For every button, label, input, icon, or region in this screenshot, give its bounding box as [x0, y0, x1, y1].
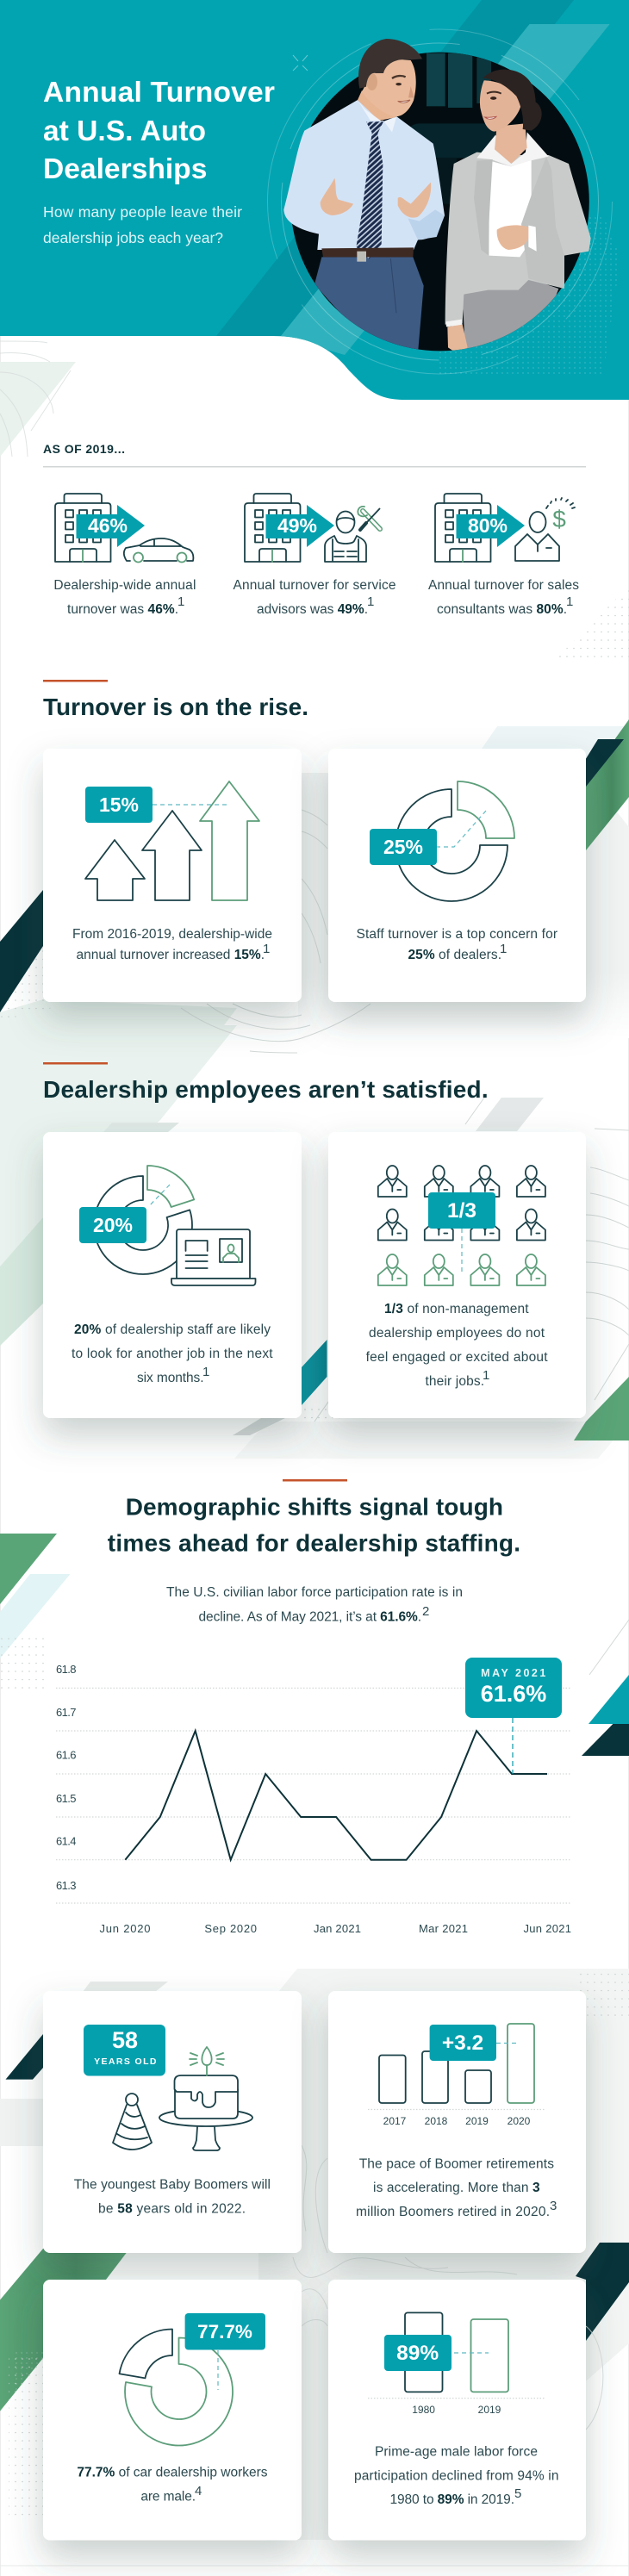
- y axis labels: 61.5: [56, 1792, 76, 1805]
- illustration: party hat and cake: YEARS OLD: [94, 2056, 158, 2067]
- panel: 20% likely to look for another job: six months.: [137, 1371, 203, 1385]
- bar chart: retirements by year: 2020: [508, 2115, 531, 2127]
- stat: dealership-wide turnover: 1: [177, 594, 184, 609]
- panel: prime-age male participation: participation declined from 94% in: [354, 2469, 558, 2484]
- icon: sales consultant: [515, 498, 575, 561]
- title: Dealerships: [43, 153, 207, 185]
- intro text: decline. As of May 2021, it’s at 61.6%.: [198, 1610, 421, 1625]
- bar chart: 1980 vs 2019: 1980: [412, 2404, 435, 2416]
- woman: [445, 152, 591, 325]
- y axis labels: 61.8: [56, 1663, 76, 1676]
- hero photo: two colleagues in circle: [283, 39, 591, 353]
- people grid: [378, 1166, 545, 1285]
- stat: dealership-wide turnover: [53, 494, 196, 617]
- stat: service advisors turnover: 49%: [277, 514, 317, 537]
- x axis labels: Jun 2020: [100, 1922, 150, 1935]
- title: [43, 77, 275, 185]
- donut chart: 25%: [383, 836, 423, 858]
- panel: 77.7% male workers: [43, 2280, 302, 2540]
- panel: 20% likely to look for another job: 1: [202, 1365, 209, 1379]
- y axis labels: [56, 1663, 76, 1892]
- y axis labels: 61.6: [56, 1749, 76, 1762]
- panel: boomer retirements bar chart: 3: [550, 2199, 557, 2213]
- panel: 15% turnover increase: annual turnover increased 15%.: [76, 948, 265, 962]
- panel: 1/3 not engaged: feel engaged or excited about: [366, 1350, 548, 1365]
- title: at U.S. Auto: [43, 115, 206, 147]
- panel: 77.7% male workers: 4: [195, 2484, 202, 2498]
- stat: sales consultants turnover: Annual turnover for sales: [428, 578, 579, 593]
- panel: prime-age male participation: Prime-age male labor force: [375, 2445, 538, 2460]
- callout: May 2021 61.6%: MAY 2021: [481, 1667, 548, 1679]
- bar chart: 1980 vs 2019: 89%: [396, 2342, 439, 2365]
- icon: mechanic: [325, 507, 380, 562]
- stat: sales consultants turnover: 1: [566, 594, 573, 609]
- panel: boomer retirements bar chart: The pace of Boomer retirements: [359, 2156, 554, 2171]
- panel: boomer retirements bar chart: million Boomers retired in 2020.: [356, 2205, 550, 2219]
- subtitle: How many people leave their: [43, 203, 242, 221]
- stat: service advisors turnover: [233, 494, 396, 617]
- donut chart: male share: 77.7%: [197, 2321, 252, 2343]
- bar chart: retirements by year: +3.2: [442, 2032, 483, 2055]
- panel: 15% turnover increase: 1: [263, 942, 270, 956]
- stat: dealership-wide turnover: 46%: [88, 514, 128, 537]
- x axis labels: Jan 2021: [314, 1922, 361, 1935]
- panel: boomer retirements bar chart: is accelerating. More than 3: [373, 2181, 540, 2195]
- intro text: [166, 1585, 463, 1625]
- intro text: The U.S. civilian labor force participation rate is in: [166, 1585, 463, 1600]
- panel: 15% turnover increase: [43, 749, 302, 1002]
- panel: 1/3 not engaged: [328, 1132, 586, 1418]
- stat: service advisors turnover: 1: [367, 594, 374, 609]
- stat: sales consultants turnover: 80%: [468, 514, 508, 537]
- panel: prime-age male participation: 1980 to 89% in 2019.: [389, 2492, 514, 2507]
- bar chart: 1980 vs 2019: 2019: [478, 2404, 501, 2416]
- panel: 1/3 not engaged: dealership employees do not: [369, 1326, 545, 1341]
- man: [283, 100, 445, 250]
- panel: 77.7% male workers: are male.: [140, 2490, 196, 2504]
- stat: service advisors turnover: Annual turnover for service: [233, 578, 396, 593]
- panel: boomer retirements bar chart: [328, 1991, 586, 2253]
- x axis labels: Sep 2020: [204, 1922, 257, 1935]
- illustration: party hat and cake: 58: [112, 2027, 138, 2053]
- bar chart: 1980 vs 2019: [368, 2312, 545, 2416]
- section heading: demographic shifts: Demographic shifts signal tough: [126, 1494, 503, 1520]
- section heading: demographic shifts: times ahead for dealership staffing.: [108, 1530, 520, 1556]
- stat: sales consultants turnover: [428, 494, 579, 617]
- y axis labels: 61.7: [56, 1706, 76, 1719]
- stat: dealership-wide turnover: Dealership-wide annual: [53, 578, 196, 593]
- x axis labels: Mar 2021: [419, 1922, 468, 1935]
- callout: May 2021 61.6%: 61.6%: [481, 1681, 546, 1707]
- section heading: turnover is on the rise: Turnover is on the rise.: [43, 694, 308, 720]
- panel: 1/3 not engaged: their jobs.: [426, 1374, 484, 1389]
- arrows chart: 15%: [99, 793, 139, 816]
- x axis labels: [100, 1922, 571, 1935]
- stat: service advisors turnover: advisors was 49%.: [257, 602, 368, 617]
- donut with laptop illustration: 20%: [93, 1214, 133, 1236]
- arrows chart: [85, 781, 259, 900]
- callout: May 2021 61.6%: [465, 1658, 562, 1718]
- people grid: 1/3: [447, 1199, 476, 1223]
- panel: prime-age male participation: 5: [514, 2486, 521, 2501]
- title: Annual Turnover: [43, 77, 275, 109]
- panel: 77.7% male workers: 77.7% of car dealership workers: [77, 2466, 268, 2480]
- donut with laptop illustration: [79, 1166, 255, 1285]
- panel: youngest boomers age 58: be 58 years old in 2022.: [98, 2202, 246, 2216]
- bar chart: retirements by year: 2017: [383, 2115, 407, 2127]
- icon: sales consultant: $: [552, 506, 566, 532]
- stat: sales consultants turnover: consultants was 80%.: [437, 602, 567, 617]
- bar chart: retirements by year: 2019: [465, 2115, 489, 2127]
- panel: 15% turnover increase: From 2016-2019, dealership-wide: [72, 927, 272, 942]
- panel: 25% top concern: 1: [500, 942, 507, 956]
- section heading: demographic shifts: [108, 1479, 520, 1556]
- y axis labels: 61.3: [56, 1879, 76, 1892]
- panel: 25% top concern: 25% of dealers.: [408, 948, 501, 962]
- panel: 25% top concern: Staff turnover is a top concern for: [357, 927, 557, 942]
- subtitle: dealership jobs each year?: [43, 229, 223, 246]
- subtitle: [43, 203, 242, 246]
- donut chart: male share: [119, 2313, 265, 2445]
- panel: youngest boomers age 58: The youngest Baby Boomers will: [74, 2177, 271, 2192]
- stat: dealership-wide turnover: turnover was 46%.: [67, 602, 178, 617]
- intro text: 2: [422, 1604, 429, 1619]
- y axis labels: 61.4: [56, 1835, 76, 1847]
- donut chart: [370, 781, 514, 901]
- panel: 25% top concern: [328, 749, 586, 1002]
- x axis labels: Jun 2021: [524, 1922, 571, 1935]
- panel: 20% likely to look for another job: 20% of dealership staff are likely: [74, 1322, 271, 1337]
- icon: car: [124, 538, 193, 562]
- illustration: party hat and cake: [84, 2025, 252, 2150]
- panel: youngest boomers age 58: [43, 1991, 302, 2253]
- panel: prime-age male participation: [328, 2280, 586, 2540]
- section heading: employees not satisfied: Dealership employees aren’t satisfied.: [43, 1076, 489, 1103]
- bar chart: retirements by year: 2018: [425, 2115, 448, 2127]
- hero banner: [0, 0, 629, 400]
- panel: 20% likely to look for another job: [43, 1132, 302, 1418]
- line chart: labor force participation: [56, 1658, 571, 1935]
- panel: 1/3 not engaged: 1/3 of non-management: [384, 1302, 529, 1316]
- bar chart: retirements by year: [368, 2024, 545, 2127]
- as of 2019 heading: AS OF 2019...: [43, 442, 125, 456]
- panel: 1/3 not engaged: 1: [483, 1368, 489, 1383]
- panel: 20% likely to look for another job: to look for another job in the next: [72, 1347, 273, 1361]
- icon: laptop: [171, 1229, 255, 1285]
